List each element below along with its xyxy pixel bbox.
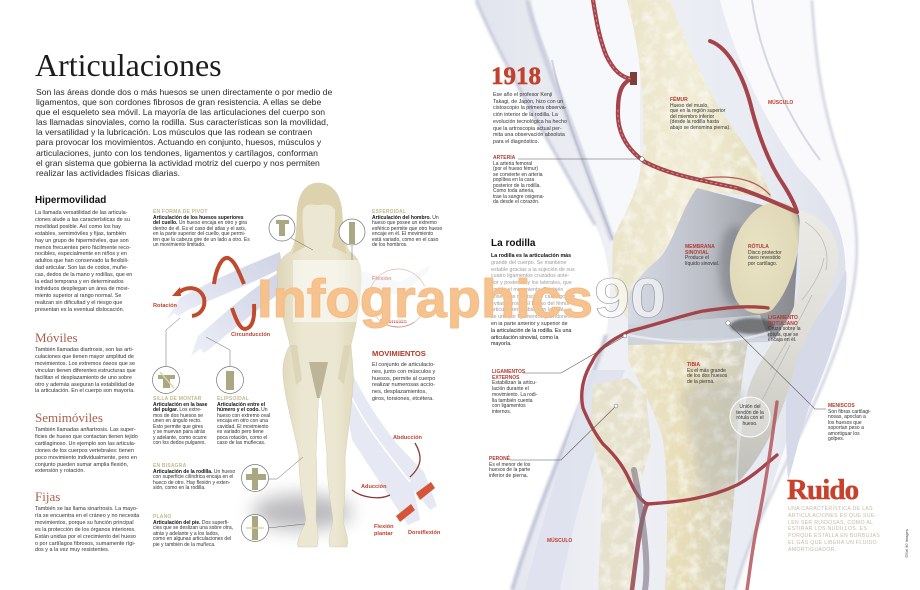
arteries — [582, 0, 797, 590]
watermark: 90 — [594, 266, 666, 329]
joint text: elipsoidal: Articulación entre el húmero y el codo. Un hueso con extremo oval encaja en otro con una cavidad. El movimiento es variado pero tiene poca rotación, como el caso de las muñecas. — [217, 402, 270, 446]
year heading: 1918 — [491, 63, 541, 90]
femur bone — [612, 0, 772, 320]
label: Abducción: Abducción — [393, 435, 422, 441]
callout: arteria: ARTERIA — [493, 155, 515, 161]
heading: Ruido: Ruido — [787, 474, 858, 506]
callout: fémur: FÉMUR — [670, 97, 688, 103]
joint text: pivot: Articulación de los huesos superiores del cuello. Un hueso encaja en otro y gira dentro de él. Es el caso del atlas y el axis, en la parte superior del cuello, que permi- ten que la cabeza gire de un lado a otro. Es un movimiento limitado. — [153, 215, 250, 248]
callout: membrana sinovial: Produce el líquido sinovial. — [685, 255, 719, 267]
joint text: plano: PLANO — [153, 514, 172, 520]
text: Movimientos: El conjunto de articulacio- nes, junto con músculos y huesos, permite al cuerpo realizar numerosas accio- nes, desplazamientos, giros, torsiones, etcétera. — [372, 362, 435, 402]
label: Flexión plantar: Flexión plantar — [374, 524, 394, 537]
joint icons with leader lines — [152, 215, 365, 542]
joint text: plano: Articulación del pie. Dos superfi- cies que se deslizan una sobre otra, atrás y adelante y a los lados, como en algunas articulaciones del pie y también de la muñeca. — [153, 520, 233, 548]
callout circle: tendon union — [730, 397, 770, 437]
label: Dorsiflexión: Dorsiflexión — [408, 530, 440, 536]
heading: Hipermovilidad: Hipermovilidad — [35, 195, 106, 206]
callout: tibia: TIBIA — [687, 362, 700, 368]
label: Flexión: Flexión — [372, 276, 392, 282]
label: Rotación: Rotación — [153, 303, 177, 309]
pointer dots — [614, 157, 730, 408]
ghost arm: circumduction — [166, 252, 284, 356]
credit: ©Sol 90 Images — [904, 529, 909, 558]
callout: ligamento rotuliano: Cruza sobre la rótula, que se encaja en él. — [768, 326, 801, 343]
joint text: pivot: EN FORMA DE PIVOT — [153, 209, 208, 215]
callout: ligamento rotuliano — [768, 315, 801, 343]
joint text: en bisagra: Articulación de la rodilla. Un hueso con superficie cilíndrica encaja en el hueco de otro. Hay flexión y exten- sión, como en la rodilla. — [153, 469, 235, 491]
callout: peroné: Es el menor de los huesos de la parte inferior de pierna. — [489, 462, 530, 479]
text: Hipermovilidad: La llamada versatilidad de las articula- ciones alude a las características de su movilidad posible. Así como los hay estables, semimóviles y fijas, también hay un grupo de hipermóviles, que son menos frecuentes pero fácilmente reco- nocibles, especialmente en niños y en adultos que han conservado la flexibili- dad articular. Son las de codos, muñe- cas, dedos de la mano y rodillas, que en la edad temprana y en determinados individuos despliegan un área de movi- miento superior al rango normal. Se realizan sin dificultad y el riesgo que presentan es la eventual dislocación. — [35, 210, 132, 313]
callout: ligamentos externos: LIGAMENTOS EXTERNOS — [492, 369, 525, 381]
callout: tibia: Es el más grande de los dos huesos de la pierna. — [687, 368, 727, 385]
text: 1918: Ese año el profesor Kenji Takagi, de Japón, hizo con un cistoscopio la primera observa- ción interior de la rodilla. La evolución tecnológica ha hecho que la artroscopia actual per- mita una observación absoluta para el diagnóstico. — [493, 92, 567, 145]
patella — [730, 202, 799, 314]
ghost arm: flexion — [358, 265, 430, 327]
watermark: Infographics — [257, 269, 593, 329]
leg band red — [396, 482, 435, 522]
human figure — [277, 183, 361, 547]
joint text: silla de montar: SILLA DE MONTAR — [153, 396, 202, 402]
callout: rótula: Disco protector óseo revestido por cartílago. — [748, 250, 782, 267]
tibia shadow — [680, 380, 745, 500]
label: músculo upper: MÚSCULO — [768, 100, 793, 106]
figure floor shadow — [252, 494, 352, 530]
callout: ligamentos externos: Estabilizan la articu- lación durante el movimiento. La rodi- lla también cuenta con ligamentos internos. — [492, 380, 537, 415]
ghost leg — [345, 368, 437, 525]
text: Ruido: UNA CARACTERÍSTICA DE LAS ARTICULACIONES ES QUE SUE- LEN SER RUIDOSAS, COMO AL ESTIRAR LOS NUDILLOS. ES PORQUE ESTALLA EN BURBUJAS EL GAS QUE LIBERA UN FLUIDO AMORTIGUADOR. — [788, 506, 880, 553]
callout: rótula: RÓTULA — [748, 244, 769, 250]
heading: Móviles: Móviles — [35, 330, 78, 345]
soft tissue — [476, 0, 857, 590]
intro text: Son las áreas donde dos o más huesos se unen directamente o por medio de ligamentos, que son cordones fibrosos de gran resistencia. A ellas se debe que el esqueleto sea móvil. La mayoría de las articulaciones del cuerpo son las llamadas sinoviales, como la rodilla. Sus características son la movilidad, la versatilidad y la lubricación. Los músculos que las rodean se contraen para provocar los movimientos. Actuando en conjunto, huesos, músculos y articulaciones, junto con los tendones, ligamentos y cartílagos, conforman el gran sistema que gobierna la actividad motriz del cuerpo y nos permiten realizar las actividades físicas diarias. — [36, 87, 332, 178]
joint text: esferoidal: ESFEROIDAL — [372, 209, 406, 215]
text: La rodilla: La rodilla es la articulación más grande del cuerpo. Se mantiene estable gracias a la sujeción de sus cuatro ligamentos cruzados ante- rior y posterior, y los laterales, que limitan el movimiento. También posee dos meniscos y cartílago que evitan el roce. El hueso del fémur articula con la tibia, con la cual se une por ligamentos y tendones en la parte anterior y superior de la articulación de la rodilla. Es una articulación sinovial, como la mayoría. — [491, 253, 576, 347]
callout: meniscos: Son fibras cartilagi- nosas, apoclan a los huesos que soportan peso a amortiguar los golpes. — [828, 409, 871, 442]
heading: Semimóviles: Semimóviles — [35, 410, 103, 425]
meniscus band — [628, 315, 770, 345]
rotation bands — [172, 258, 254, 329]
callout: membrana sinovial: MEMBRANA SINOVIAL — [685, 244, 715, 256]
joint capsule membrane — [628, 188, 800, 338]
text: Fijas: También se las llama sinartrosis. La mayo- ría se encuentra en el cráneo y no necesita movimientos, porque su función principal es la protección de los órganos interiores. Están unidas por el crecimiento del hueso o por cartílagos fibrosos, sumamente rígi- dos y a la vez muy resistentes. — [35, 506, 139, 553]
callout: fémur: Hueso del muslo, que en la región superior del miembro inferior (desde la rodilla hasta abajo se denomina pierna). — [670, 103, 731, 131]
callout: peroné: PERONÉ — [489, 456, 510, 462]
patellar tendon — [738, 210, 839, 482]
callout: membrana sinovial — [685, 244, 719, 267]
heading: Fijas: Fijas — [35, 489, 60, 504]
joint text: en bisagra: EN BISAGRA — [153, 463, 186, 469]
label: Circunducción: Circunducción — [231, 332, 270, 338]
dark joint shadow — [719, 225, 751, 305]
callout text: unión del tendón: Unión del tendón de la rótula con el hueso. — [736, 404, 764, 427]
joint text: silla de montar: Articulación en la base del pulgar. Los extre- mos de dos huesos se unen en ángulo recto. Esto permite que gires y se muevan para atrás y adelante, como ocurre con los dedos pulgares. — [153, 402, 207, 446]
fibula bone — [590, 378, 651, 590]
label: músculo lower: MÚSCULO — [547, 538, 572, 544]
label: Extensión: Extensión — [380, 319, 407, 325]
joint text: elipsoidal: ELIPSOIDAL — [217, 396, 249, 402]
label: Aducción: Aducción — [361, 484, 386, 490]
pointer lines — [510, 159, 826, 460]
text: Semimóviles: También llamadas anfiartrosis. Las super- ficies de hueso que contactan tienen tejido cartilaginoso. Un ejemplo son las articula- ciones de los cuerpos vertebrales: tienen poco movimiento individualmente, pero en conjunto pueden sumar amplia flexión, extensión y rotación. — [35, 427, 138, 474]
text: Móviles: También llamadas diartrosis, son las arti- culaciones que tienen mayor amplitud de movimientos. Los extremos óseos que se vinculan tienen diferentes estructuras que facilitan el desplazamiento de uno sobre otro y además aseguran la estabilidad de la articulación. En el cuerpo son mayoría. — [35, 347, 136, 394]
abduction and adduction arrows — [352, 443, 420, 498]
callout: arteria: La arteria femoral (por el hueso fémur) se convierte en arteria poplítea en la cara posterior de la rodilla. Como toda arteria, trae la sangre oxigena- da desde el corazón. — [493, 161, 544, 205]
tibia bone — [628, 342, 748, 590]
joint text: esferoidal: Articulación del hombro. Un hueso que posee un extremo esférico permite que otro hueso encaje en él. El movimiento está variado, como en el caso de los hombros. — [372, 215, 442, 248]
callout: ligamento rotuliano: LIGAMENTO ROTULIANO — [768, 315, 798, 327]
heading: La rodilla: La rodilla — [491, 238, 535, 249]
callout: meniscos: MENISCOS — [828, 403, 855, 409]
title: Articulaciones — [35, 47, 222, 83]
heading: Movimientos: MOVIMIENTOS — [372, 349, 426, 358]
